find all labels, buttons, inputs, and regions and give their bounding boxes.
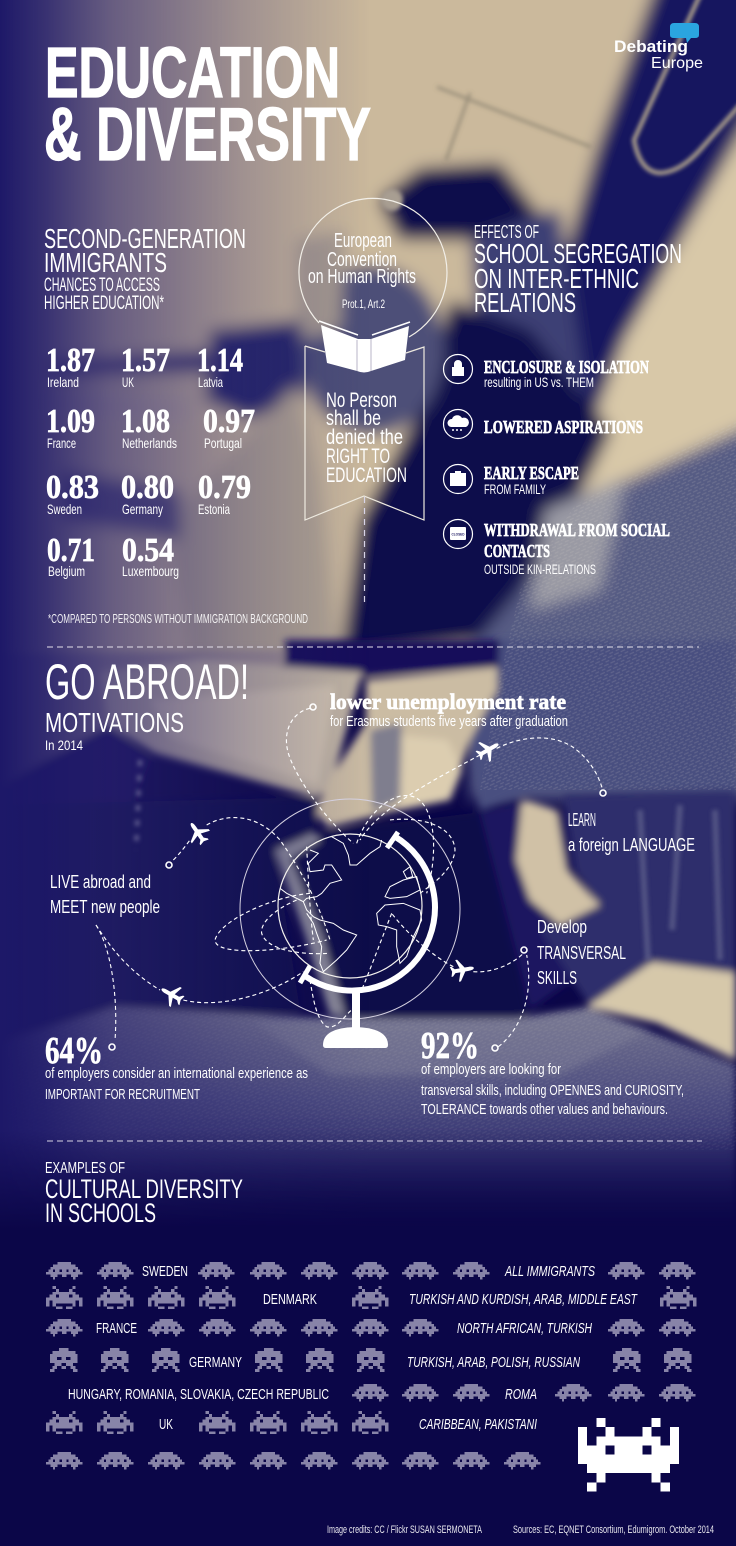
callout: learn a foreign language bbox=[568, 810, 695, 855]
callout: live abroad: MEET new people bbox=[50, 897, 160, 917]
effect: enclosure and isolation: ENCLOSURE & ISOLATION bbox=[484, 357, 649, 377]
effect: lowered aspirations bbox=[444, 410, 643, 438]
country statistics: UK bbox=[122, 374, 134, 390]
title: EDUCATION bbox=[45, 34, 340, 113]
effect: withdrawal from social contacts: CONTACTS bbox=[484, 541, 550, 561]
stat: 92 percent: 92% bbox=[421, 1025, 479, 1067]
heading: effects of school segregation: ON INTER-ETHNIC bbox=[474, 263, 639, 294]
convention circle with book and banner: Prot.1, Art.2 bbox=[342, 297, 385, 311]
country statistics: 1.14 bbox=[197, 342, 243, 379]
country statistics: 0.97 bbox=[203, 403, 255, 440]
immigrant group labels: ROMA bbox=[505, 1386, 537, 1403]
heading: second-generation immigrants bbox=[44, 223, 246, 314]
stat: 64 percent bbox=[45, 1030, 308, 1103]
convention circle with book and banner: European bbox=[334, 230, 392, 252]
heading: second-generation immigrants: IMMIGRANTS bbox=[44, 247, 167, 278]
title bbox=[44, 34, 371, 176]
heading: second-generation immigrants: HIGHER EDUCATION* bbox=[44, 293, 164, 314]
callout: live abroad: LIVE abroad and bbox=[50, 872, 151, 892]
heading: second-generation immigrants: SECOND-GENERATION bbox=[44, 223, 246, 254]
callout: lower unemployment rate: lower unemployment rate bbox=[330, 689, 566, 714]
country statistics: 0.80 bbox=[121, 469, 174, 506]
heading: go abroad: GO ABROAD! bbox=[45, 654, 249, 710]
heading: go abroad: MOTIVATIONS bbox=[45, 707, 184, 738]
effect: early escape: FROM FAMILY bbox=[484, 481, 546, 497]
callout: develop transversal skills: TRANSVERSAL bbox=[537, 943, 626, 963]
country statistics: Sweden bbox=[47, 501, 82, 517]
immigrant group labels: ALL IMMIGRANTS bbox=[504, 1263, 595, 1280]
heading: go abroad bbox=[45, 654, 249, 753]
country statistics: 1.09 bbox=[46, 403, 95, 440]
country statistics: Estonia bbox=[198, 501, 230, 517]
logo: Debating Europe bbox=[614, 23, 703, 72]
callout: develop transversal skills: SKILLS bbox=[537, 968, 577, 988]
country statistics: Germany bbox=[122, 501, 163, 517]
stat: 92 percent bbox=[421, 1025, 684, 1118]
heading: cultural diversity in schools: IN SCHOOLS bbox=[45, 1198, 156, 1228]
country labels: SWEDEN bbox=[142, 1263, 188, 1280]
convention circle with book and banner: RIGHT TO bbox=[326, 445, 390, 468]
country labels: FRANCE bbox=[96, 1320, 137, 1337]
country labels bbox=[68, 1263, 329, 1433]
heading: effects of school segregation: EFFECTS OF bbox=[474, 222, 539, 242]
country statistics: 0.54 bbox=[122, 532, 174, 569]
logo: Debating Europe: Debating bbox=[614, 37, 688, 56]
country statistics: Portugal bbox=[204, 435, 242, 451]
convention circle with book and banner bbox=[299, 198, 447, 604]
immigrant group labels: NORTH AFRICAN, TURKISH bbox=[457, 1320, 592, 1337]
heading: cultural diversity in schools: CULTURAL DIVERSITY bbox=[45, 1174, 243, 1204]
country statistics: France bbox=[47, 435, 76, 451]
country labels: HUNGARY, ROMANIA, SLOVAKIA, CZECH REPUBLIC bbox=[68, 1386, 329, 1403]
country statistics: 0.71 bbox=[47, 532, 95, 569]
country labels: DENMARK bbox=[263, 1291, 317, 1308]
heading: cultural diversity in schools: EXAMPLES OF bbox=[45, 1160, 125, 1177]
airplanes bbox=[156, 734, 504, 1010]
country statistics bbox=[46, 342, 255, 579]
heading: second-generation immigrants: CHANCES TO ACCESS bbox=[44, 275, 160, 296]
country statistics: 0.79 bbox=[198, 469, 251, 506]
country statistics: 1.57 bbox=[121, 342, 170, 379]
effect: early escape: EARLY ESCAPE bbox=[484, 463, 579, 483]
effect: enclosure and isolation bbox=[444, 354, 649, 390]
country labels: UK bbox=[159, 1416, 173, 1433]
country statistics: Luxembourg bbox=[122, 563, 179, 579]
route endpoint markers bbox=[109, 704, 606, 1051]
country statistics: Belgium bbox=[48, 563, 85, 579]
country labels: GERMANY bbox=[189, 1354, 242, 1371]
effect: lowered aspirations: LOWERED ASPIRATIONS bbox=[484, 417, 643, 437]
country statistics: 1.08 bbox=[121, 403, 170, 440]
country statistics: 1.87 bbox=[46, 342, 95, 379]
country statistics: Netherlands bbox=[122, 435, 177, 451]
immigrant group labels: TURKISH AND KURDISH, ARAB, MIDDLE EAST bbox=[409, 1291, 638, 1308]
stat: 64 percent: of employers consider an international experience as bbox=[45, 1065, 308, 1082]
immigrant group labels: CARIBBEAN, PAKISTANI bbox=[419, 1416, 537, 1433]
stat: 64 percent: 64% bbox=[45, 1030, 103, 1072]
icon: large white invader bbox=[578, 1418, 679, 1491]
callout: learn a foreign language: LEARN bbox=[568, 810, 596, 830]
convention circle with book and banner: Convention bbox=[327, 249, 397, 271]
immigrant group labels bbox=[407, 1263, 638, 1433]
heading: go abroad: In 2014 bbox=[45, 737, 83, 753]
convention circle with book and banner: denied the bbox=[326, 426, 403, 449]
heading: effects of school segregation bbox=[474, 222, 682, 318]
heading: cultural diversity in schools bbox=[45, 1160, 243, 1228]
callout: lower unemployment rate bbox=[330, 689, 568, 730]
invader rows bbox=[46, 1262, 696, 1470]
country statistics: Ireland bbox=[47, 374, 79, 390]
callout: lower unemployment rate: for Erasmus students five years after graduation bbox=[330, 713, 568, 730]
effect: withdrawal from social contacts: CLOSED bbox=[452, 532, 465, 536]
effect: withdrawal from social contacts: OUTSIDE KIN-RELATIONS bbox=[484, 561, 596, 577]
heading: effects of school segregation: RELATIONS bbox=[474, 287, 576, 318]
effect: enclosure and isolation: resulting in US vs. THEM bbox=[484, 374, 594, 390]
callout: develop transversal skills bbox=[537, 917, 626, 988]
convention circle with book and banner: No Person bbox=[326, 389, 397, 412]
credits bbox=[327, 1524, 714, 1536]
footnote: *COMPARED TO PERSONS WITHOUT IMMIGRATION BACKGROUND bbox=[48, 611, 308, 626]
stat: 92 percent: of employers are looking for bbox=[421, 1061, 561, 1078]
convention circle with book and banner: shall be bbox=[326, 407, 381, 430]
convention circle with book and banner: on Human Rights bbox=[308, 266, 416, 288]
callout: live abroad bbox=[50, 872, 160, 917]
stat: 64 percent: IMPORTANT FOR RECRUITMENT bbox=[45, 1086, 200, 1103]
country statistics: 0.83 bbox=[46, 469, 99, 506]
convention circle with book and banner: EDUCATION bbox=[326, 464, 407, 487]
globe with flight routes bbox=[96, 708, 603, 1048]
immigrant group labels: TURKISH, ARAB, POLISH, RUSSIAN bbox=[407, 1354, 580, 1371]
credits: Image credits: CC / Flickr SUSAN SERMONETA bbox=[327, 1524, 482, 1536]
effect: early escape bbox=[444, 463, 579, 497]
title: & DIVERSITY bbox=[44, 92, 371, 176]
callout: develop transversal skills: Develop bbox=[537, 917, 587, 937]
country statistics: Latvia bbox=[198, 374, 223, 390]
effect: withdrawal from social contacts bbox=[444, 520, 670, 577]
logo: Debating Europe: Europe bbox=[651, 55, 703, 72]
